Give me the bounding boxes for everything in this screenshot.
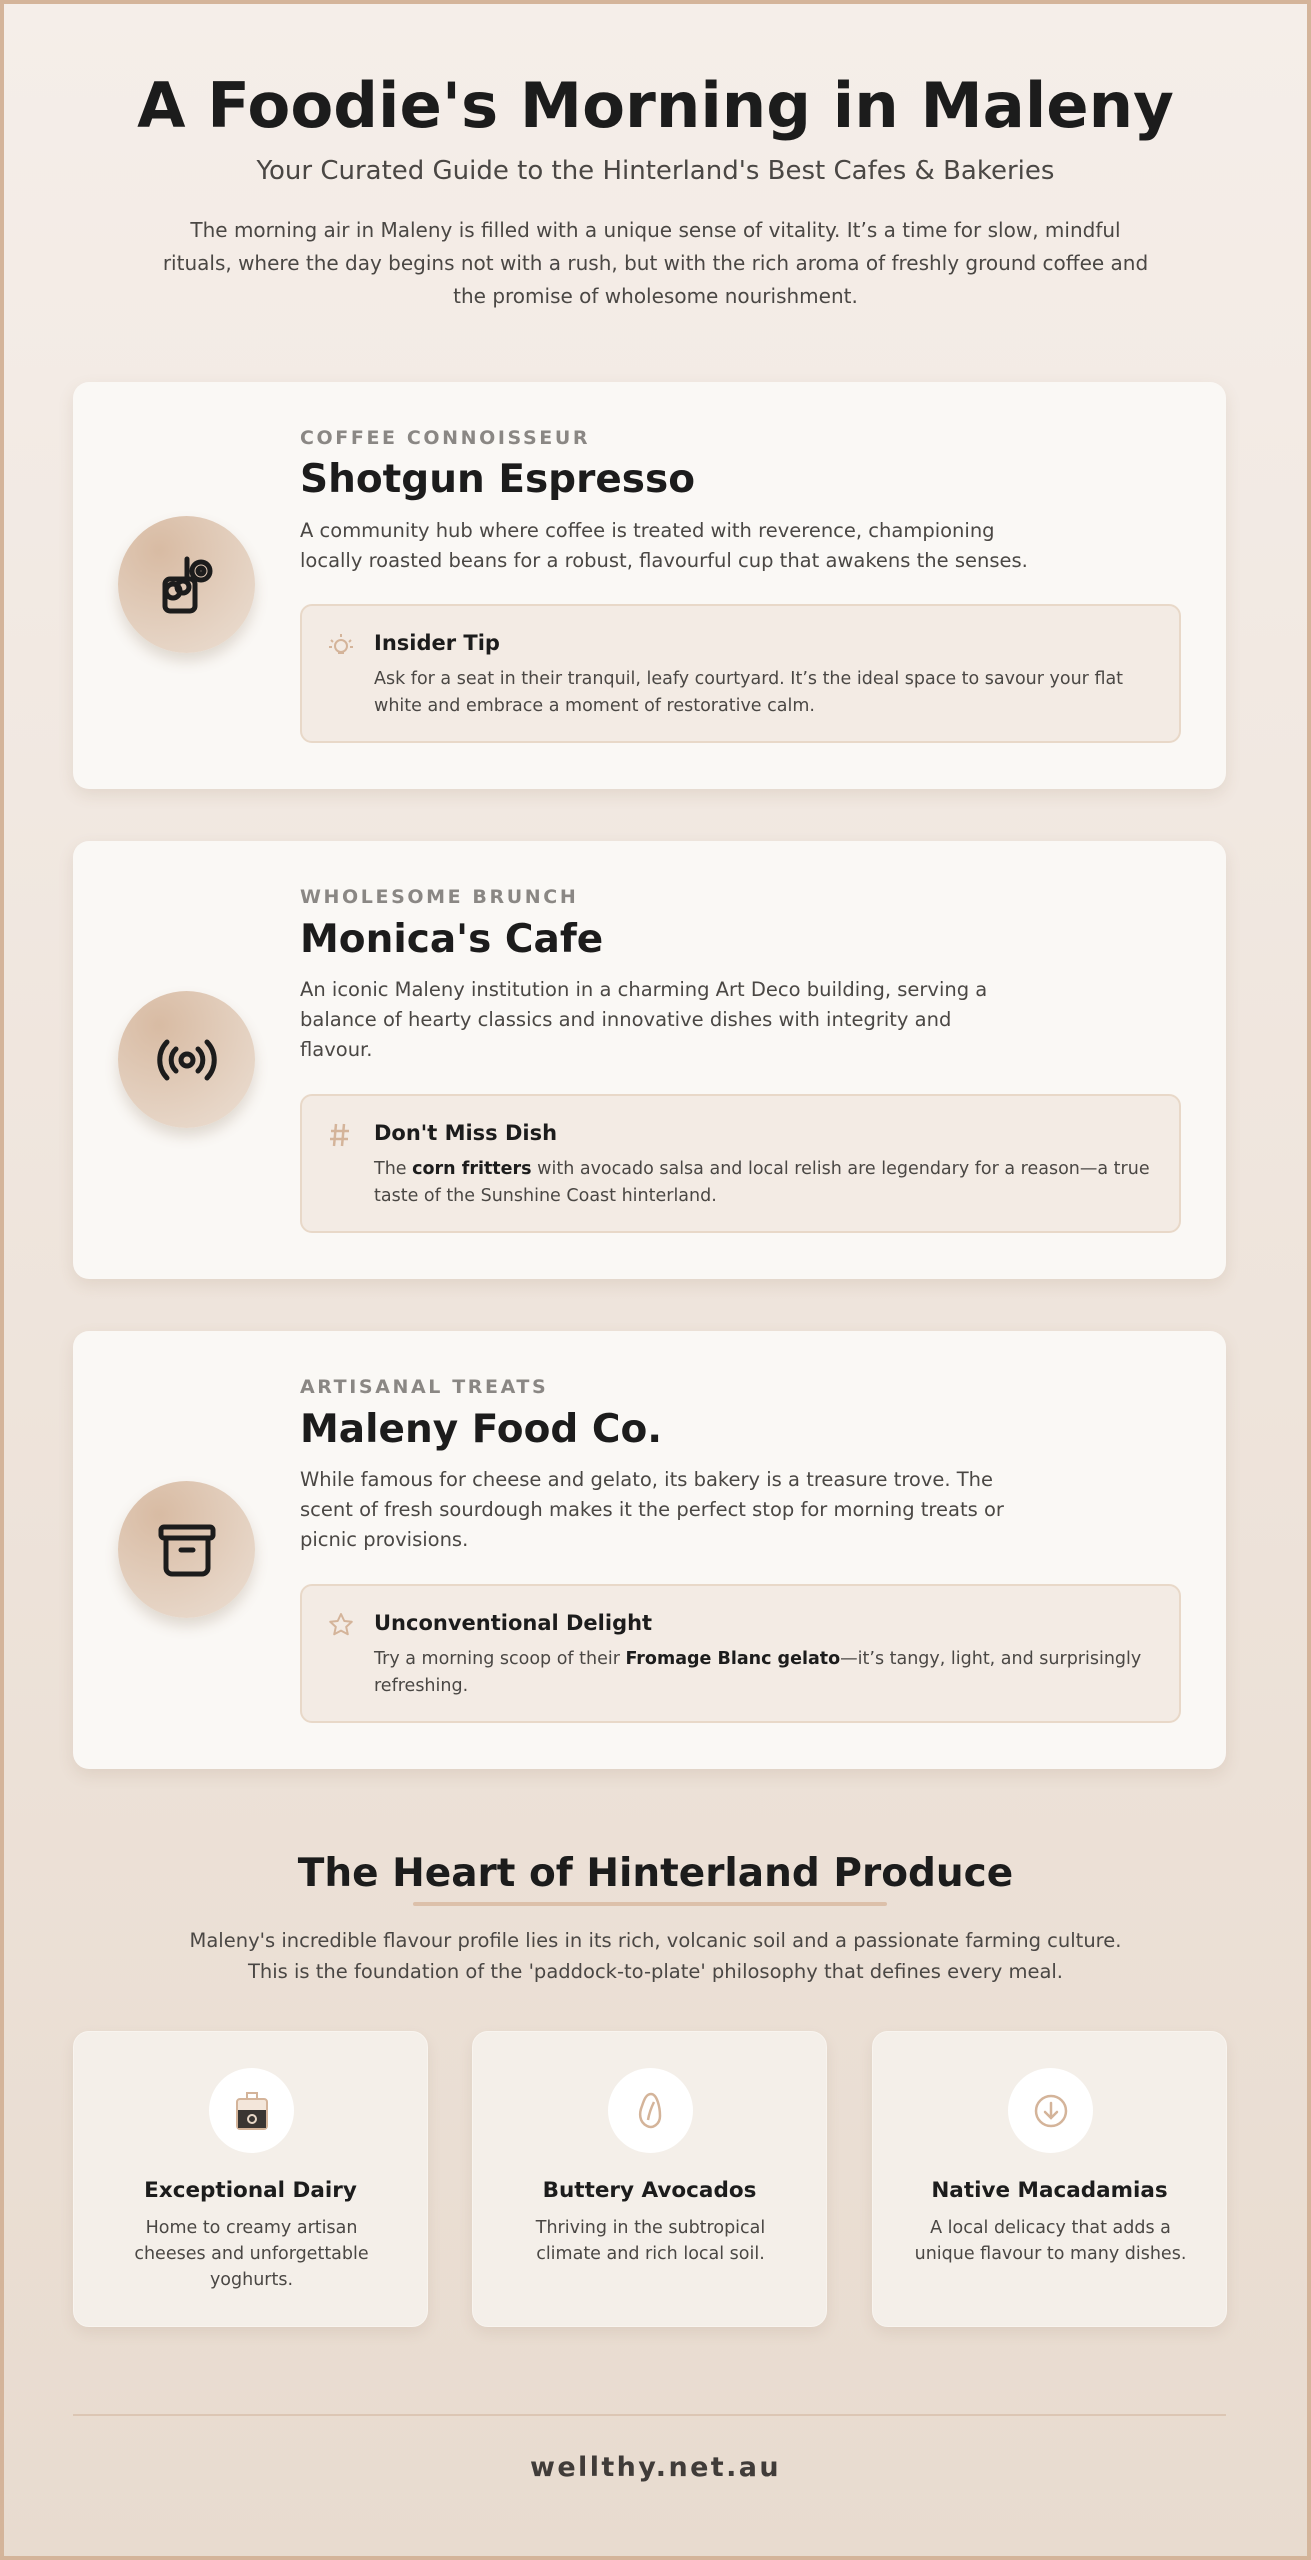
callout: insider tip: Insider Tip (374, 631, 500, 655)
description: While famous for cheese and gelato, its bakery is a treasure trove. The scent of fresh sourdough makes it the perfect stop for morning treats or picnic provisions. (300, 1468, 1004, 1551)
description: An iconic Maleny institution in a charming Art Deco building, serving a balance of hearty classics and innovative dishes with integrity and flavour. (300, 978, 987, 1061)
divider (73, 2414, 1226, 2416)
icon: star (329, 1613, 353, 1636)
panel: Exceptional Dairy: Exceptional Dairy (144, 2178, 357, 2203)
icon: archive box (118, 1481, 255, 1618)
cafe name: Shotgun Espresso (300, 457, 695, 502)
cafe name: Monica's Cafe (300, 917, 603, 962)
category label: COFFEE CONNOISSEUR (300, 427, 590, 449)
subtitle: Your Curated Guide to the Hinterland's Best Cafes & Bakeries (257, 156, 1054, 186)
callout: unconventional delight: Try a morning scoop of their Fromage Blanc gelato—it’s tangy, light, and surprisingly refreshing. (374, 1649, 1141, 1696)
icon: hash (330, 1124, 349, 1146)
callout: don't miss dish (300, 1094, 1181, 1233)
callout: unconventional delight (300, 1584, 1181, 1723)
heading underline (413, 1902, 887, 1906)
description: A community hub where coffee is treated with reverence, championing locally roasted beans for a robust, flavourful cup that awakens the senses. (300, 519, 1028, 572)
icon: broadcast (118, 991, 255, 1128)
panel: Buttery Avocados: Buttery Avocados (543, 2178, 756, 2203)
panel: Shotgun Espresso (73, 382, 1226, 789)
section text: Maleny's incredible flavour profile lies in its rich, volcanic soil and a passionate farming culture. This is the foundation of the 'paddock-to-plate' philosophy that defines every meal. (190, 1929, 1121, 1983)
panel: Native Macadamias: Native Macadamias (931, 2178, 1168, 2203)
intro text: The morning air in Maleny is filled with a unique sense of vitality. It’s a time for slow, mindful rituals, where the day begins not with a rush, but with the rich aroma of freshly ground coffee and the promise of wholesome nourishment. (163, 218, 1148, 308)
callout: don't miss dish: Don't Miss Dish (374, 1121, 557, 1145)
callout: don't miss dish: The corn fritters with avocado salsa and local relish are legendary for a reason—a true taste of the Sunshine Coast hinterland. (374, 1159, 1150, 1206)
category label: WHOLESOME BRUNCH (300, 886, 578, 908)
panel: Maleny Food Co. (73, 1331, 1226, 1769)
footer: wellthy.net.au (530, 2452, 781, 2483)
panel: Monica's Cafe (73, 841, 1226, 1279)
panel: Native Macadamias (872, 2031, 1227, 2327)
callout: insider tip: Ask for a seat in their tranquil, leafy courtyard. It’s the ideal space to savour your flat white and embrace a moment of restorative calm. (374, 669, 1123, 716)
icon: nut circle (1008, 2068, 1093, 2153)
cafe name: Maleny Food Co. (300, 1407, 662, 1452)
icon: avocado (608, 2068, 693, 2153)
panel: Buttery Avocados: Thriving in the subtropical climate and rich local soil. (536, 2218, 765, 2264)
icon: coffee (118, 516, 255, 653)
title: A Foodie's Morning in Maleny (137, 69, 1174, 142)
panel: Exceptional Dairy (73, 2031, 428, 2327)
panel: Exceptional Dairy: Home to creamy artisan cheeses and unforgettable yoghurts. (134, 2218, 369, 2290)
callout: unconventional delight: Unconventional Delight (374, 1611, 652, 1635)
category label: ARTISANAL TREATS (300, 1376, 548, 1398)
section heading: The Heart of Hinterland Produce (298, 1851, 1013, 1896)
icon: milk (209, 2068, 294, 2153)
icon: bulb (329, 634, 353, 654)
callout: insider tip (300, 604, 1181, 743)
panel: Buttery Avocados (472, 2031, 827, 2327)
panel: Native Macadamias: A local delicacy that adds a unique flavour to many dishes. (915, 2218, 1186, 2264)
